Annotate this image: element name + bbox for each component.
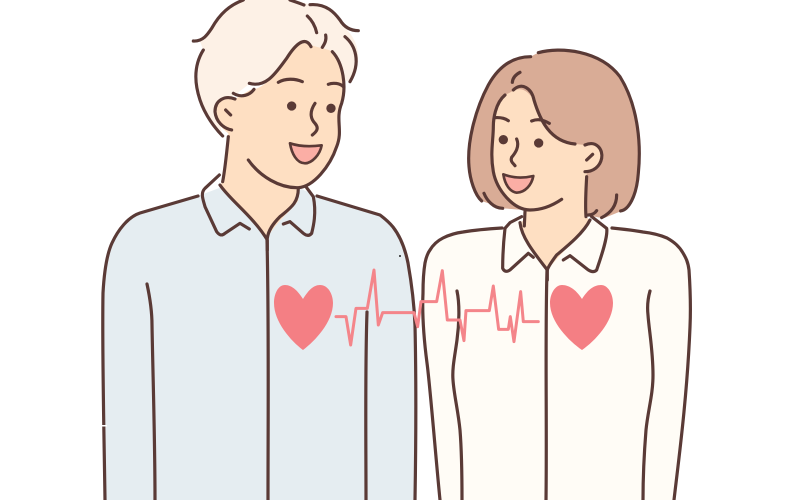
left heart xyxy=(274,285,333,350)
man eyes xyxy=(287,101,336,113)
man head xyxy=(193,0,358,250)
man shirt xyxy=(103,187,416,500)
man figure xyxy=(103,0,416,500)
right heart xyxy=(550,285,613,350)
woman head xyxy=(469,50,639,280)
woman mouth xyxy=(503,174,533,193)
woman figure xyxy=(423,50,690,500)
man mouth xyxy=(290,143,322,163)
woman shirt xyxy=(423,220,690,500)
heartbeat line xyxy=(336,270,538,345)
woman collar xyxy=(503,217,607,280)
man collar xyxy=(202,175,315,250)
woman eyes xyxy=(499,135,543,148)
